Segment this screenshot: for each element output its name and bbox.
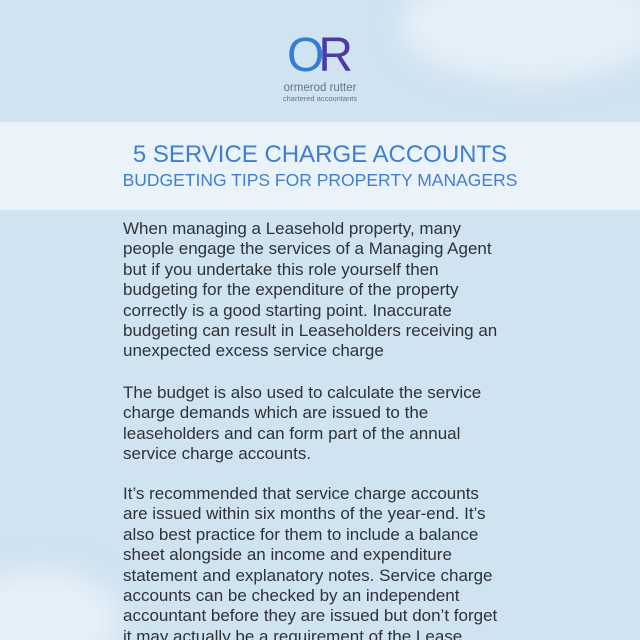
- paragraph 3: [123, 484, 498, 640]
- paragraph 1: unexpected excess service charge: [123, 341, 384, 360]
- paragraph 3: sheet alongside an income and expenditure: [123, 545, 452, 564]
- paragraph 1: [123, 219, 497, 360]
- paragraph 3: accountant before they are issued but don’t forget: [123, 606, 497, 625]
- logo: chartered accountants: [283, 94, 357, 103]
- paragraph 2: charge demands which are issued to the: [123, 403, 428, 422]
- paragraph 3: accounts can be checked by an independent: [123, 586, 459, 605]
- paragraph 3: statement and explanatory notes. Service charge: [123, 566, 492, 585]
- paragraph 1: When managing a Leasehold property, many: [123, 219, 461, 238]
- paragraph 3: also best practice for them to include a balance: [123, 525, 478, 544]
- paragraph 2: [123, 383, 481, 463]
- paragraph 3: are issued within six months of the year-end. It’s: [123, 504, 486, 523]
- paragraph 2: service charge accounts.: [123, 444, 311, 463]
- paragraph 1: budgeting for the expenditure of the property: [123, 280, 459, 299]
- paragraph 2: leaseholders and can form part of the annual: [123, 424, 460, 443]
- logo: [283, 29, 357, 103]
- paragraph 2: The budget is also used to calculate the service: [123, 383, 481, 402]
- title: 5 SERVICE CHARGE ACCOUNTS: [133, 141, 507, 168]
- logo mark: OR: [287, 29, 347, 82]
- paragraph 1: budgeting can result in Leaseholders receiving an: [123, 321, 497, 340]
- logo text: ormerod rutter: [284, 82, 356, 94]
- paragraph 1: people engage the services of a Managing Agent: [123, 239, 492, 258]
- subtitle: BUDGETING TIPS FOR PROPERTY MANAGERS: [123, 170, 517, 190]
- title band: [0, 122, 640, 210]
- paragraph 1: but if you undertake this role yourself then: [123, 260, 439, 279]
- paragraph 3: It’s recommended that service charge accounts: [123, 484, 479, 503]
- paragraph 1: correctly is a good starting point. Inaccurate: [123, 301, 452, 320]
